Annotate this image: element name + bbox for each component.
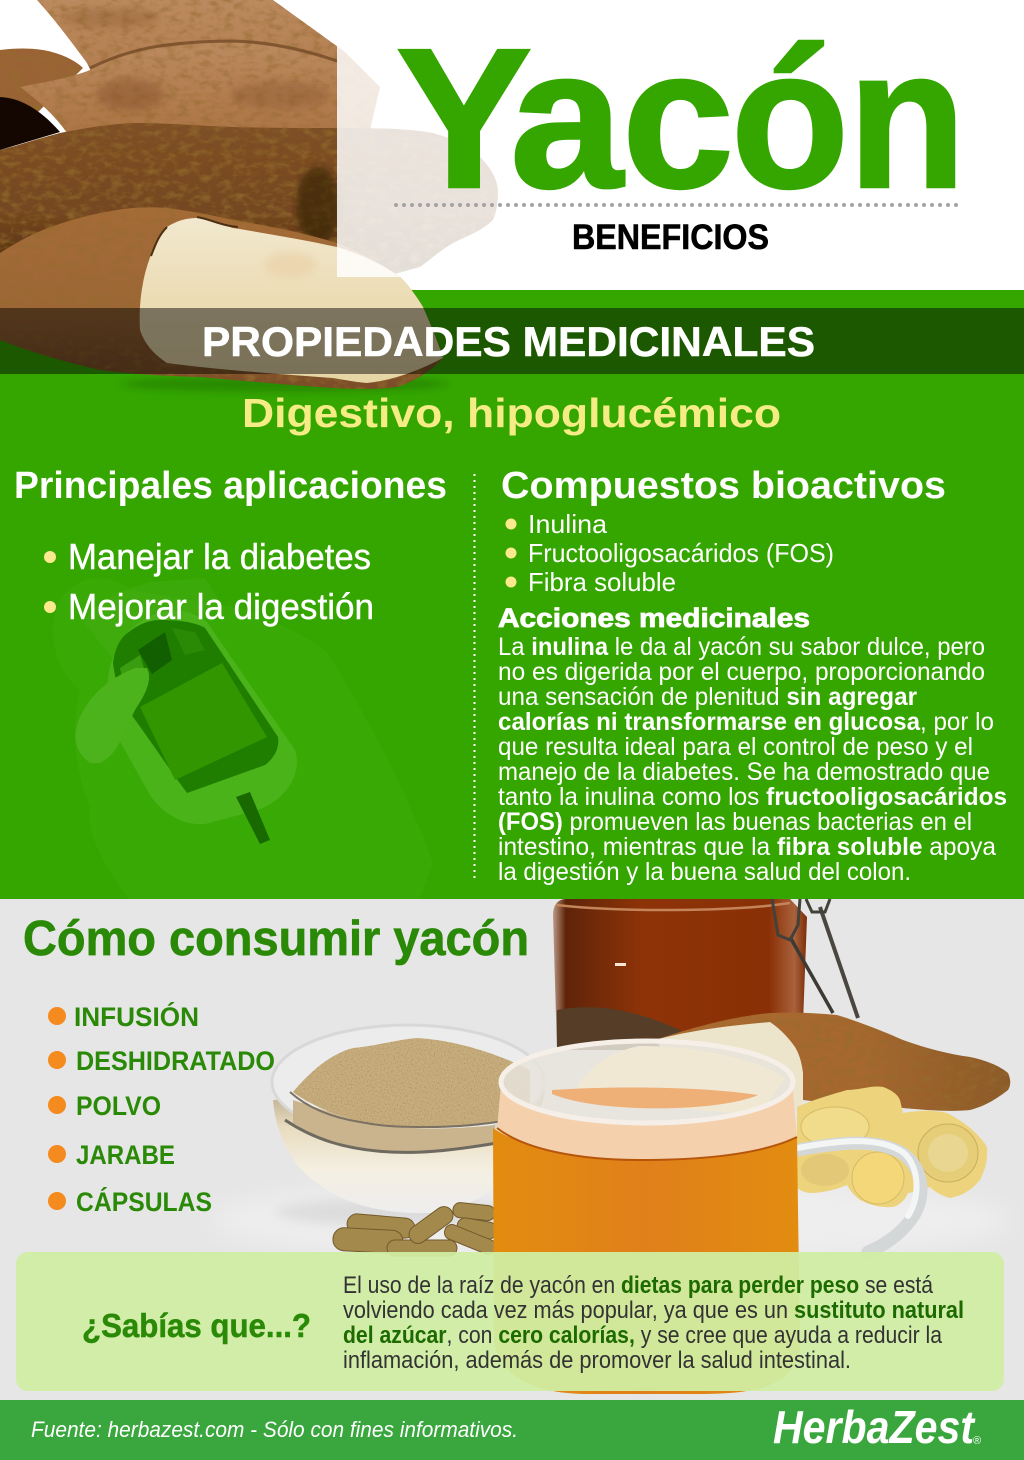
title: Yacón: a: [510, 8, 624, 230]
paragraph: medicinal actions: una sensación de plenitud sin agregar: [498, 683, 917, 711]
image: dried yacon slices: [797, 1087, 987, 1207]
image: glucose meter in hand, green tint: [53, 578, 433, 899]
paragraph: medicinal actions: no es digerida por el cuerpo, proporcionando: [498, 658, 985, 686]
callout heading: ¿Sabías que...?: [82, 1307, 311, 1344]
list: forms of consumption: CÁPSULAS: [76, 1186, 212, 1217]
column: compuestos bioactivos: [498, 465, 1007, 886]
heading: Cómo consumir yacón: Cómo consumir yacón: [23, 912, 529, 966]
callout text: inflamación, además de promover la salud intestinal.: [343, 1347, 851, 1374]
list: forms of consumption: POLVO: [76, 1091, 161, 1121]
paragraph: medicinal actions: la digestión y la buena salud del colon.: [498, 858, 911, 886]
dark heading band: [0, 308, 1024, 374]
paragraph: medicinal actions: (FOS) promueven las buenas bacterias en el: [498, 808, 972, 836]
subheading: Digestivo, hipoglucémico: Digestivo, hipoglucémico: [242, 390, 781, 436]
heading: Compuestos bioactivos: Compuestos bioactivos: [501, 465, 946, 507]
footer bar: [0, 1400, 1024, 1460]
heading: Propiedades medicinales: PROPIEDADES MEDICINALES: [202, 318, 815, 365]
paragraph: medicinal actions: calorías ni transformarse en glucosa, por lo: [498, 708, 994, 736]
list: forms of consumption: INFUSIÓN: [74, 1001, 199, 1032]
column: principales aplicaciones: [14, 465, 447, 627]
image: glass bowl with powder: [272, 1025, 545, 1226]
paragraph: medicinal actions: tanto la inulina como los fructooligosacáridos: [498, 783, 1007, 811]
callout text: volviendo cada vez más popular, ya que es un sustituto natural: [343, 1297, 964, 1324]
list: forms of consumption: [48, 1001, 275, 1217]
image: capsules: [332, 1202, 498, 1257]
paragraph: medicinal actions: intestino, mientras que la fibra soluble apoya: [498, 833, 996, 861]
section background: white header: [0, 0, 1024, 290]
subtitle: Beneficios: BENEFICIOS: [572, 218, 769, 257]
heading: Principales aplicaciones: Principales aplicaciones: [14, 465, 447, 507]
callout: did you know: [16, 1252, 1004, 1391]
bullet list of compounds: Fructooligosacáridos (FOS): [528, 538, 834, 568]
bullet 2: [44, 601, 56, 613]
paragraph: medicinal actions: La inulina le da al yacón su sabor dulce, pero: [498, 633, 985, 661]
list: forms of consumption: JARABE: [76, 1140, 175, 1170]
callout background: [16, 1252, 1004, 1391]
image: syrup jar: [553, 899, 858, 1050]
list: forms of consumption: DESHIDRATADO: [76, 1046, 275, 1076]
title: Yacón: n: [848, 8, 966, 230]
callout text: [343, 1272, 964, 1374]
bullet list of compounds: Inulina: [528, 509, 608, 539]
paragraph: medicinal actions: que resulta ideal para el control de peso y el: [498, 733, 973, 761]
title: Yacón: [396, 8, 966, 230]
image: yacon root: [655, 1013, 1010, 1111]
footer logo: HerbaZest: HerbaZest: [773, 1401, 976, 1453]
bullet list of compounds: Fibra soluble: [528, 567, 676, 597]
bullet 1: [44, 551, 56, 563]
title: Yacón: ó: [731, 8, 849, 230]
footer logo: HerbaZest: ®: [973, 1435, 981, 1447]
title: Yacón: Y: [396, 8, 532, 230]
item: Mejorar la digestión: Mejorar la digestión: [68, 586, 374, 627]
callout text: del azúcar, con cero calorías, y se cree que ayuda a reducir la: [343, 1322, 943, 1349]
paragraph: medicinal actions: [498, 633, 1007, 886]
bullet list of compounds: [506, 509, 834, 597]
soft floor highlight under the products: [210, 1178, 1010, 1262]
image: yacon roots photo: [0, 0, 498, 389]
paragraph: medicinal actions: manejo de la diabetes. Se ha demostrado que: [498, 758, 990, 786]
image: cup of yacon tea: [493, 1041, 921, 1394]
callout text: El uso de la raíz de yacón en dietas para perder peso se está: [343, 1272, 934, 1299]
title: Yacón: c: [622, 8, 734, 230]
subheading: Acciones medicinales: Acciones medicinales: [498, 603, 810, 633]
soft shadow under yacon: [120, 376, 450, 392]
footer source: Fuente: herbazest.com - Sólo con fines informativos.: [31, 1417, 518, 1442]
item: Manejar la diabetes: Manejar la diabetes: [68, 536, 371, 577]
panel: how to consume: [0, 899, 1024, 1400]
white translucent overlay panel behind title: [337, 0, 1024, 277]
panel: green properties section: [0, 290, 1024, 899]
